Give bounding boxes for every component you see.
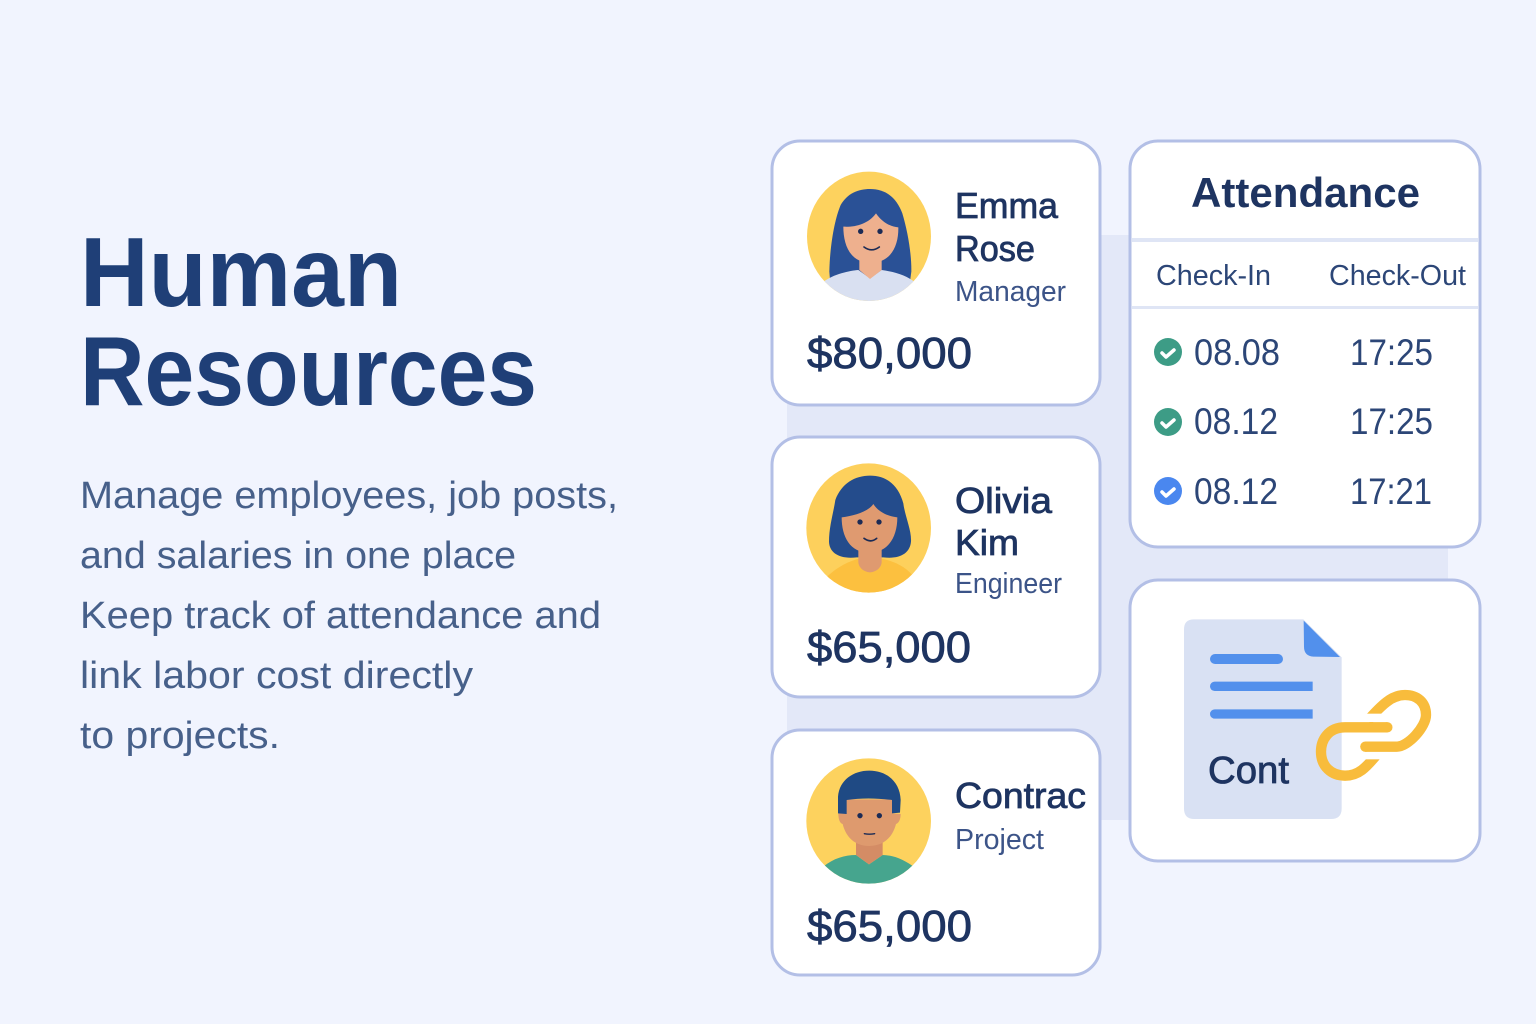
description text: link labor cost directly: [80, 655, 473, 697]
name and role: [955, 185, 1066, 308]
panel: Emma Rose card: [772, 141, 1100, 405]
column headers: Check-In: [1156, 260, 1271, 292]
name and role: Kim: [955, 522, 1019, 563]
salary: $65,000: [807, 902, 972, 951]
name and role: Emma: [955, 185, 1059, 226]
row 2: 17:25: [1350, 401, 1433, 442]
name and role: Contrac: [955, 775, 1086, 816]
name and role: Rose: [955, 228, 1035, 269]
row 3: 08.12: [1194, 471, 1278, 512]
icon: Emma avatar: [807, 172, 931, 303]
column headers: [1156, 260, 1466, 292]
attendance heading: Attendance: [1191, 169, 1420, 216]
document label: Cont: [1208, 750, 1289, 792]
panel: Contractor card: [772, 730, 1100, 975]
title: [80, 217, 537, 426]
panel: Olivia Kim card: [772, 437, 1100, 697]
title: Human: [80, 217, 402, 327]
title: Resources: [80, 316, 537, 426]
icon: chain link: [1321, 695, 1426, 776]
icon: contract document: [1184, 619, 1342, 819]
icon: Olivia avatar: [806, 463, 931, 597]
salary: $65,000: [807, 623, 971, 672]
description text: to projects.: [80, 715, 280, 757]
description text: [80, 475, 618, 757]
name and role: [955, 480, 1062, 600]
description text: Manage employees, job posts,: [80, 475, 618, 517]
name and role: Manager: [955, 276, 1066, 308]
panel: attendance: [1130, 141, 1480, 547]
column headers: Check-Out: [1329, 260, 1466, 292]
row 1: 17:25: [1350, 332, 1433, 373]
row 1: [1154, 332, 1433, 373]
row 3: [1154, 471, 1432, 512]
row 2: 08.12: [1194, 401, 1278, 442]
row 2: [1154, 401, 1433, 442]
icon: contractor avatar: [806, 758, 931, 887]
name and role: Project: [955, 824, 1044, 856]
row 3: 17:21: [1350, 471, 1432, 512]
description text: Keep track of attendance and: [80, 595, 601, 637]
panel: contract: [1130, 580, 1480, 861]
name and role: Engineer: [955, 568, 1062, 600]
row 1: 08.08: [1194, 332, 1280, 373]
name and role: Olivia: [955, 480, 1053, 521]
salary: $80,000: [807, 329, 972, 378]
backing panel: [787, 235, 1448, 820]
description text: and salaries in one place: [80, 535, 516, 577]
name and role: [955, 775, 1086, 856]
